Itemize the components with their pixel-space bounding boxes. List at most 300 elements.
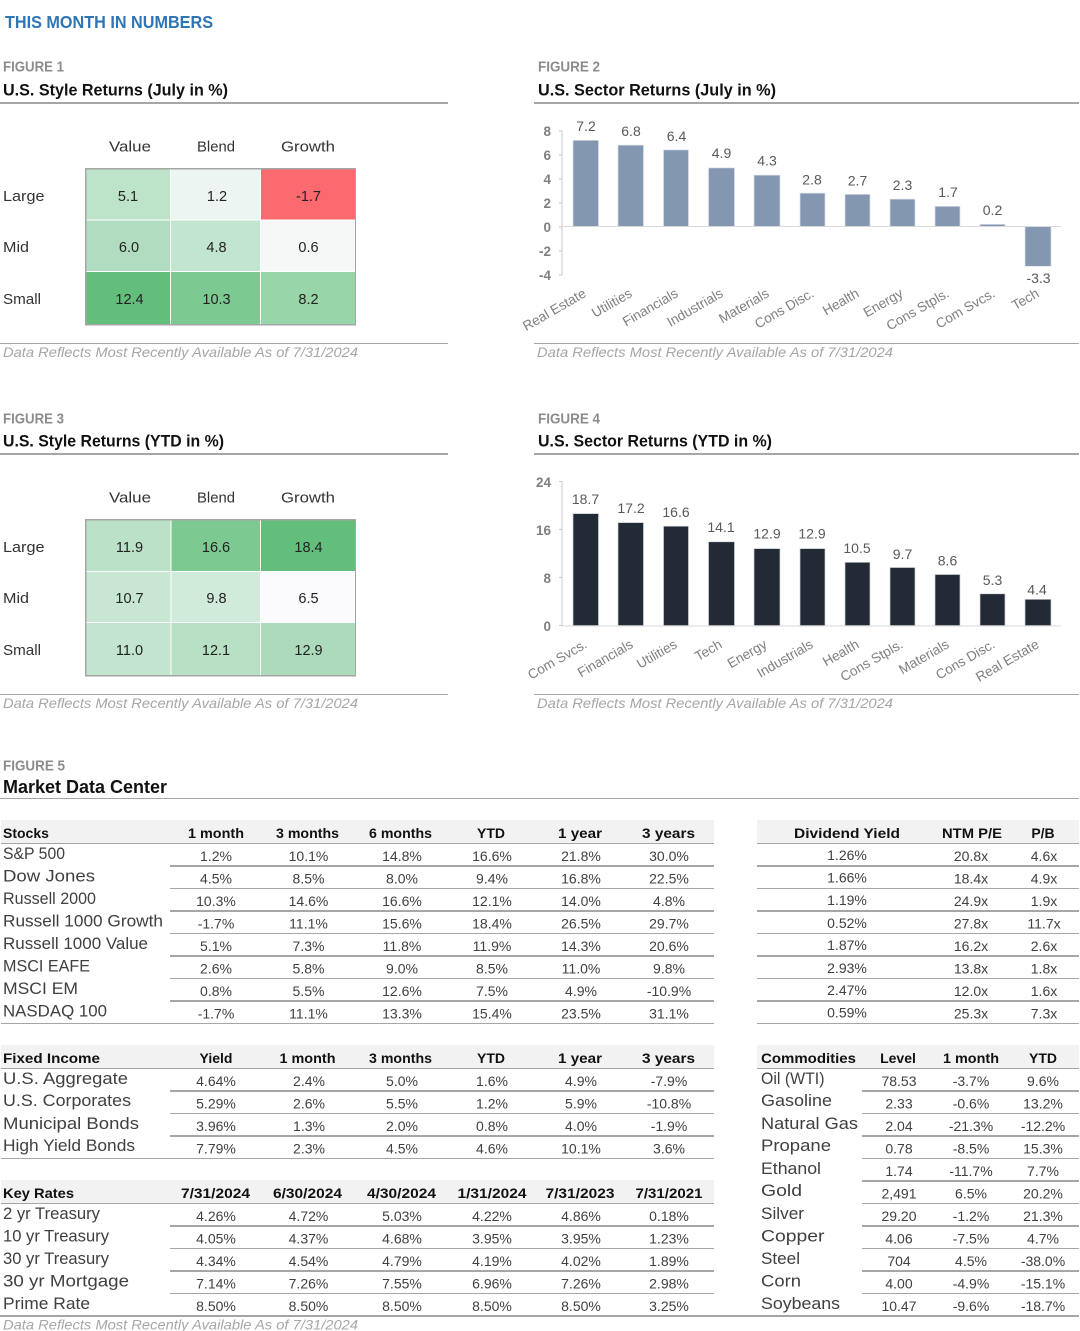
stocks values: 26.5%	[561, 916, 601, 932]
stocks values: 8.5%	[476, 960, 508, 976]
stocks values: 14.0%	[561, 893, 601, 909]
valuation values: 12.0x	[954, 983, 988, 999]
stocks values: 15.6%	[382, 916, 422, 932]
data labels: 6.4	[667, 128, 686, 144]
category labels: Real Estate	[973, 637, 1042, 685]
stocks header: 3 months	[276, 825, 339, 841]
bar chart: July sector returns	[520, 118, 1061, 334]
key rates values: 7.14%	[196, 1276, 236, 1292]
valuation values: 2.93%	[827, 960, 867, 976]
panel: figure 3 style returns YTD	[0, 412, 448, 711]
heatmap: YTD style returns: Blend	[197, 490, 235, 506]
stocks labels	[3, 845, 163, 1020]
stocks values: 30.0%	[649, 848, 689, 864]
stocks values: -1.7%	[198, 916, 234, 932]
key rates labels: 2 yr Treasury	[3, 1205, 101, 1223]
valuation values: 1.26%	[827, 847, 867, 863]
fixed income values: 4.6%	[476, 1140, 508, 1156]
heatmap: YTD style returns: 18.4	[294, 540, 323, 556]
stocks values: 4.9%	[565, 983, 597, 999]
fixed income values: 2.0%	[386, 1118, 418, 1134]
valuation values: 7.3x	[1031, 1006, 1057, 1022]
fixed income labels	[3, 1070, 139, 1155]
panel: figure 5 market data center	[0, 758, 1079, 1331]
panel: figure 4 sector returns YTD	[525, 412, 1079, 711]
heatmap: July style returns: Value	[109, 138, 151, 156]
commodities values: -21.3%	[949, 1118, 993, 1134]
data labels: 0.2	[983, 202, 1002, 218]
stocks values: -10.9%	[647, 983, 691, 999]
heatmap: July style returns	[3, 138, 356, 326]
heatmap: YTD style returns: 6.5	[298, 591, 319, 607]
fixed income values: 2.6%	[293, 1096, 325, 1112]
commodities values: 4.7%	[1027, 1230, 1059, 1246]
key rates values: 4.05%	[196, 1230, 236, 1246]
fixed income values: 5.0%	[386, 1073, 418, 1089]
fixed income values: 2.4%	[293, 1073, 325, 1089]
stocks values: 13.3%	[382, 1006, 422, 1022]
commodities values: -18.7%	[1021, 1298, 1065, 1314]
figure 2 source note: Data Reflects Most Recently Available As of 7/31/2024	[537, 344, 893, 360]
table: stocks	[1, 820, 714, 1024]
category labels: Energy	[725, 637, 770, 671]
fixed income values: 2.3%	[293, 1140, 325, 1156]
y axis labels	[536, 475, 551, 634]
key rates header: 7/31/2024	[181, 1185, 250, 1201]
key rates values: 8.50%	[561, 1298, 601, 1314]
key rates header: 4/30/2024	[367, 1185, 436, 1201]
data labels: 4.4	[1027, 582, 1047, 598]
key rates labels	[3, 1205, 129, 1313]
heatmap: YTD style returns: Large	[3, 539, 44, 556]
table: valuation	[757, 820, 1079, 1024]
commodities values	[881, 1073, 1065, 1314]
heatmap: July style returns: 8.2	[298, 292, 319, 308]
heatmap: YTD style returns: 9.8	[206, 591, 227, 607]
data labels	[572, 491, 1047, 598]
fixed income values: -1.9%	[651, 1118, 687, 1134]
table: fixed income	[1, 1045, 714, 1159]
panel: figure 2 sector returns July	[520, 60, 1079, 360]
commodities header: Level	[880, 1050, 916, 1066]
fixed income header: YTD	[477, 1050, 505, 1066]
valuation values: 0.59%	[827, 1004, 867, 1020]
valuation values: 25.3x	[954, 1006, 988, 1022]
commodities labels: Silver	[761, 1205, 805, 1223]
category labels	[520, 286, 1042, 334]
table: key rates	[0, 1180, 714, 1317]
key rates values: 3.25%	[649, 1298, 689, 1314]
fixed income labels: Municipal Bonds	[3, 1115, 139, 1133]
data labels: 12.9	[798, 526, 826, 542]
valuation header: P/B	[1031, 825, 1055, 841]
stocks values: 15.4%	[472, 1006, 512, 1022]
fixed income labels: U.S. Corporates	[3, 1092, 131, 1110]
fixed income values: 4.5%	[386, 1140, 418, 1156]
category labels: Real Estate	[520, 286, 588, 334]
data labels: 17.2	[617, 500, 645, 516]
stocks header	[3, 825, 695, 841]
stocks values: 31.1%	[649, 1006, 689, 1022]
data labels: 7.2	[576, 118, 596, 134]
commodities labels: Steel	[761, 1250, 800, 1268]
category labels: Industrials	[754, 637, 816, 681]
stocks labels: MSCI EAFE	[3, 958, 90, 976]
figure 3 label: FIGURE 3	[3, 412, 64, 428]
commodities values: 6.5%	[955, 1186, 987, 1202]
fixed income header: 1 month	[280, 1050, 336, 1066]
panel: figure 1 style returns July	[0, 60, 448, 360]
stocks values: 0.8%	[200, 983, 232, 999]
valuation values: 4.9x	[1031, 870, 1057, 886]
stocks values: 1.2%	[200, 848, 232, 864]
key rates header: 7/31/2023	[546, 1185, 615, 1201]
stocks header: 1 year	[558, 825, 603, 841]
heatmap: July style returns: 5.1	[118, 189, 138, 205]
stocks labels: MSCI EM	[3, 980, 78, 998]
stocks labels: Russell 2000	[3, 890, 96, 908]
heatmap: July style returns: Growth	[281, 138, 335, 156]
key rates values: 3.95%	[561, 1230, 601, 1246]
figure 1 source note: Data Reflects Most Recently Available As of 7/31/2024	[3, 344, 358, 360]
valuation values: 11.7x	[1027, 916, 1061, 932]
category labels: Cons Disc.	[752, 286, 816, 331]
commodities values: 15.3%	[1023, 1140, 1063, 1156]
key rates values: 8.50%	[289, 1298, 328, 1314]
fixed income values: 0.8%	[476, 1118, 508, 1134]
stocks values: 11.0%	[562, 960, 600, 976]
valuation header: Dividend Yield	[794, 825, 900, 841]
commodities values: 0.78	[885, 1140, 913, 1156]
valuation values: 27.8x	[954, 916, 988, 932]
key rates labels: 30 yr Mortgage	[3, 1272, 129, 1290]
heatmap: July style returns: Large	[3, 188, 44, 205]
stocks values: 7.3%	[293, 938, 324, 954]
category labels: Com Svcs.	[933, 286, 998, 331]
valuation values: 1.19%	[827, 892, 867, 908]
stocks labels: Russell 1000 Growth	[3, 912, 163, 930]
commodities labels: Gold	[761, 1182, 802, 1200]
fixed income values: 4.9%	[565, 1073, 597, 1089]
title: THIS MONTH IN NUMBERS	[5, 12, 213, 32]
valuation values: 13.8x	[954, 960, 988, 976]
data labels: 6.8	[621, 123, 641, 139]
stocks values: 7.5%	[476, 983, 508, 999]
commodities values: 13.2%	[1023, 1096, 1063, 1112]
stocks labels: S&P 500	[3, 845, 65, 863]
commodities values: 4.5%	[955, 1253, 987, 1269]
key rates values: 2.98%	[649, 1276, 689, 1292]
valuation values: 1.9x	[1031, 893, 1057, 909]
stocks values: 5.8%	[293, 960, 324, 976]
data labels: 2.3	[893, 177, 912, 193]
key rates values: 4.86%	[561, 1208, 601, 1224]
stocks labels: Dow Jones	[3, 868, 95, 886]
stocks values: 4.8%	[653, 893, 685, 909]
stocks values: 12.1%	[472, 893, 512, 909]
commodities values: -0.6%	[953, 1096, 989, 1112]
stocks values: 16.6%	[382, 893, 422, 909]
commodities values: 9.6%	[1027, 1073, 1059, 1089]
category labels: Financials	[575, 637, 636, 680]
valuation values: 20.8x	[954, 848, 988, 864]
stocks values: 22.5%	[649, 870, 689, 886]
data labels: 14.1	[707, 519, 735, 535]
stocks values: 5.1%	[200, 938, 232, 954]
valuation values	[827, 847, 1061, 1022]
heatmap: YTD style returns: 10.7	[115, 591, 144, 607]
key rates values: 4.37%	[289, 1230, 328, 1246]
fixed income values: 5.29%	[196, 1096, 236, 1112]
heatmap: YTD style returns: 16.6	[202, 540, 230, 556]
commodities values: 7.7%	[1027, 1163, 1059, 1179]
fixed income header	[3, 1050, 695, 1066]
valuation values: 1.6x	[1031, 983, 1057, 999]
heatmap: YTD style returns: 12.9	[294, 643, 323, 659]
table: commodities	[757, 1045, 1079, 1317]
commodities labels	[761, 1070, 858, 1313]
commodities values: -7.5%	[953, 1230, 989, 1246]
figure 4 source note: Data Reflects Most Recently Available As of 7/31/2024	[537, 695, 893, 711]
commodities values: 4.06	[885, 1230, 913, 1246]
category labels: Materials	[896, 637, 952, 677]
key rates values: 4.72%	[289, 1208, 328, 1224]
stocks values: 11.8%	[383, 938, 421, 954]
key rates values: 4.79%	[382, 1253, 422, 1269]
commodities values: 2.33	[885, 1096, 913, 1112]
figure 5 heading: Market Data Center	[3, 777, 167, 797]
key rates values	[196, 1208, 689, 1314]
heatmap: YTD style returns: Growth	[281, 490, 335, 506]
commodities values: -8.5%	[953, 1140, 989, 1156]
heatmap: July style returns: Small	[3, 291, 41, 308]
heatmap: YTD style returns: 12.1	[202, 643, 230, 659]
commodities header: 1 month	[943, 1050, 999, 1066]
commodities values: 1.74	[885, 1163, 913, 1179]
fixed income values: 10.1%	[561, 1140, 601, 1156]
stocks values: 18.4%	[472, 916, 512, 932]
fixed income values: 1.3%	[293, 1118, 325, 1134]
valuation values: 1.8x	[1031, 960, 1057, 976]
y axis labels: 24	[536, 475, 551, 490]
stocks values: 12.6%	[382, 983, 422, 999]
category labels: Industrials	[664, 286, 726, 330]
stocks values: 5.5%	[293, 983, 324, 999]
commodities labels: Corn	[761, 1272, 801, 1290]
commodities labels: Oil (WTI)	[761, 1070, 824, 1088]
key rates values: 7.55%	[382, 1276, 422, 1292]
fixed income values: 5.9%	[565, 1096, 597, 1112]
key rates values: 4.22%	[472, 1208, 512, 1224]
y axis labels: 4	[543, 172, 551, 187]
heatmap: YTD style returns: 11.0	[116, 643, 143, 659]
data labels: 2.8	[802, 172, 822, 188]
stocks values: 20.6%	[649, 938, 689, 954]
stocks values: 11.1%	[289, 916, 328, 932]
fixed income values: 3.6%	[653, 1140, 685, 1156]
stocks values: 16.6%	[472, 848, 512, 864]
valuation values: 4.6x	[1031, 848, 1057, 864]
heatmap: July style returns: Blend	[197, 138, 235, 156]
data labels: 18.7	[572, 491, 599, 507]
figure 3 heading: U.S. Style Returns (YTD in %)	[3, 432, 224, 450]
data labels: 10.5	[843, 540, 871, 556]
data labels: 8.6	[938, 552, 957, 568]
valuation values: 24.9x	[954, 893, 988, 909]
stocks values: 10.1%	[289, 848, 328, 864]
commodities header	[761, 1050, 1057, 1066]
y axis labels: 6	[543, 148, 551, 163]
stocks labels: Russell 1000 Value	[3, 935, 148, 953]
key rates values: 4.02%	[561, 1253, 601, 1269]
heatmap: July style returns: 12.4	[115, 292, 144, 308]
key rates header: Key Rates	[3, 1185, 74, 1201]
heatmap: July style returns: Mid	[3, 239, 29, 256]
stocks header: 6 months	[369, 825, 432, 841]
valuation values: 2.47%	[827, 982, 867, 998]
y axis labels	[539, 124, 551, 283]
key rates values: 0.18%	[649, 1208, 689, 1224]
category labels: Com Svcs.	[525, 637, 590, 682]
y axis labels: 8	[543, 124, 551, 139]
fixed income values: 4.0%	[565, 1118, 597, 1134]
key rates labels: 30 yr Treasury	[3, 1250, 110, 1268]
commodities header: Commodities	[761, 1050, 856, 1066]
category labels: Utilities	[634, 637, 680, 672]
bar chart: YTD sector returns	[525, 475, 1061, 685]
commodities values: 21.3%	[1023, 1208, 1063, 1224]
valuation header: NTM P/E	[942, 825, 1002, 841]
stocks values: 4.5%	[200, 870, 232, 886]
stocks values: 23.5%	[561, 1006, 601, 1022]
stocks values: 2.6%	[200, 960, 232, 976]
key rates values: 8.50%	[196, 1298, 236, 1314]
figure 4 label: FIGURE 4	[538, 412, 600, 428]
data labels: -3.3	[1026, 270, 1051, 286]
heatmap: YTD style returns: 11.9	[116, 540, 143, 556]
commodities values: 2,491	[881, 1186, 917, 1202]
figure 1 heading: U.S. Style Returns (July in %)	[3, 82, 228, 100]
data labels	[576, 118, 1051, 286]
key rates values: 4.19%	[472, 1253, 512, 1269]
y axis labels: 0	[543, 619, 551, 634]
data labels: 1.7	[938, 184, 958, 200]
figure 4 heading: U.S. Sector Returns (YTD in %)	[538, 432, 772, 450]
commodities values: 704	[887, 1253, 911, 1269]
valuation values: 16.2x	[954, 938, 988, 954]
valuation header	[794, 825, 1055, 841]
stocks values: 8.5%	[293, 870, 324, 886]
key rates header: 6/30/2024	[273, 1185, 342, 1201]
category labels: Cons Stpls.	[838, 637, 906, 684]
heatmap: YTD style returns: Value	[109, 490, 151, 506]
stocks values: 10.3%	[196, 893, 236, 909]
y axis labels: 2	[543, 196, 551, 211]
commodities labels: Copper	[761, 1228, 825, 1246]
fixed income header: 1 year	[558, 1050, 603, 1066]
data labels: 4.3	[757, 152, 777, 168]
stocks header: YTD	[477, 825, 505, 841]
data labels: 2.7	[848, 172, 867, 188]
category labels: Tech	[1009, 286, 1042, 313]
fixed income header: 3 years	[642, 1050, 695, 1066]
commodities values: -9.6%	[953, 1298, 989, 1314]
commodities labels: Soybeans	[761, 1295, 840, 1313]
commodities values: 78.53	[881, 1073, 917, 1089]
figure 5 label: FIGURE 5	[3, 758, 65, 774]
category labels: Health	[820, 286, 862, 318]
fixed income header: Fixed Income	[3, 1050, 100, 1066]
stocks values: 9.4%	[476, 870, 508, 886]
fixed income header: 3 months	[369, 1050, 432, 1066]
valuation values: 18.4x	[954, 870, 988, 886]
commodities values: 10.47	[881, 1298, 917, 1314]
commodities values: -3.7%	[953, 1073, 989, 1089]
stocks header: 1 month	[188, 825, 244, 841]
category labels: Materials	[716, 286, 772, 326]
heatmap: July style returns: 0.6	[298, 240, 319, 256]
heatmap: July style returns: 4.8	[206, 240, 227, 256]
stocks values: 14.3%	[561, 938, 601, 954]
y axis labels: -4	[539, 268, 551, 283]
key rates values: 6.96%	[472, 1276, 512, 1292]
commodities values: -38.0%	[1021, 1253, 1065, 1269]
category labels	[525, 637, 1042, 685]
valuation values: 0.52%	[827, 915, 867, 931]
category labels: Cons Disc.	[933, 637, 998, 682]
key rates values: 1.89%	[649, 1253, 689, 1269]
heatmap: YTD style returns: Small	[3, 642, 41, 659]
fixed income labels: High Yield Bonds	[3, 1137, 135, 1155]
stocks values: 14.6%	[289, 893, 328, 909]
fixed income values: 5.5%	[386, 1096, 418, 1112]
commodities values: -1.2%	[953, 1208, 989, 1224]
key rates values: 8.50%	[472, 1298, 512, 1314]
y axis labels: 0	[543, 220, 551, 235]
key rates labels: Prime Rate	[3, 1295, 90, 1313]
category labels: Energy	[861, 286, 906, 320]
stocks values: 8.0%	[386, 870, 418, 886]
heatmap: YTD style returns: Mid	[3, 590, 29, 607]
commodities labels: Propane	[761, 1137, 831, 1155]
stocks values: 29.7%	[649, 916, 689, 932]
y axis labels: -2	[539, 244, 551, 259]
stocks labels: NASDAQ 100	[3, 1002, 107, 1020]
valuation values: 2.6x	[1031, 938, 1057, 954]
key rates values: 8.50%	[382, 1298, 422, 1314]
data labels: 5.3	[983, 572, 1002, 588]
stocks values: 9.8%	[653, 960, 685, 976]
fixed income labels: U.S. Aggregate	[3, 1070, 128, 1088]
heatmap: July style returns: 1.2	[207, 189, 227, 205]
data labels: 9.7	[893, 546, 912, 562]
heatmap: July style returns: 6.0	[119, 240, 139, 256]
fixed income values: -10.8%	[647, 1096, 691, 1112]
category labels: Tech	[692, 637, 724, 664]
data labels: 16.6	[662, 504, 690, 520]
key rates values: 4.68%	[382, 1230, 422, 1246]
category labels: Cons Stpls.	[884, 286, 952, 333]
key rates values: 5.03%	[382, 1208, 422, 1224]
y axis labels: 8	[543, 571, 551, 586]
data labels: 12.9	[753, 526, 781, 542]
figure 1 label: FIGURE 1	[3, 60, 64, 76]
stocks values: 14.8%	[382, 848, 422, 864]
stocks values: 9.0%	[386, 960, 418, 976]
commodities header: YTD	[1029, 1050, 1057, 1066]
fixed income header: Yield	[200, 1050, 232, 1066]
stocks values: -1.7%	[198, 1006, 234, 1022]
